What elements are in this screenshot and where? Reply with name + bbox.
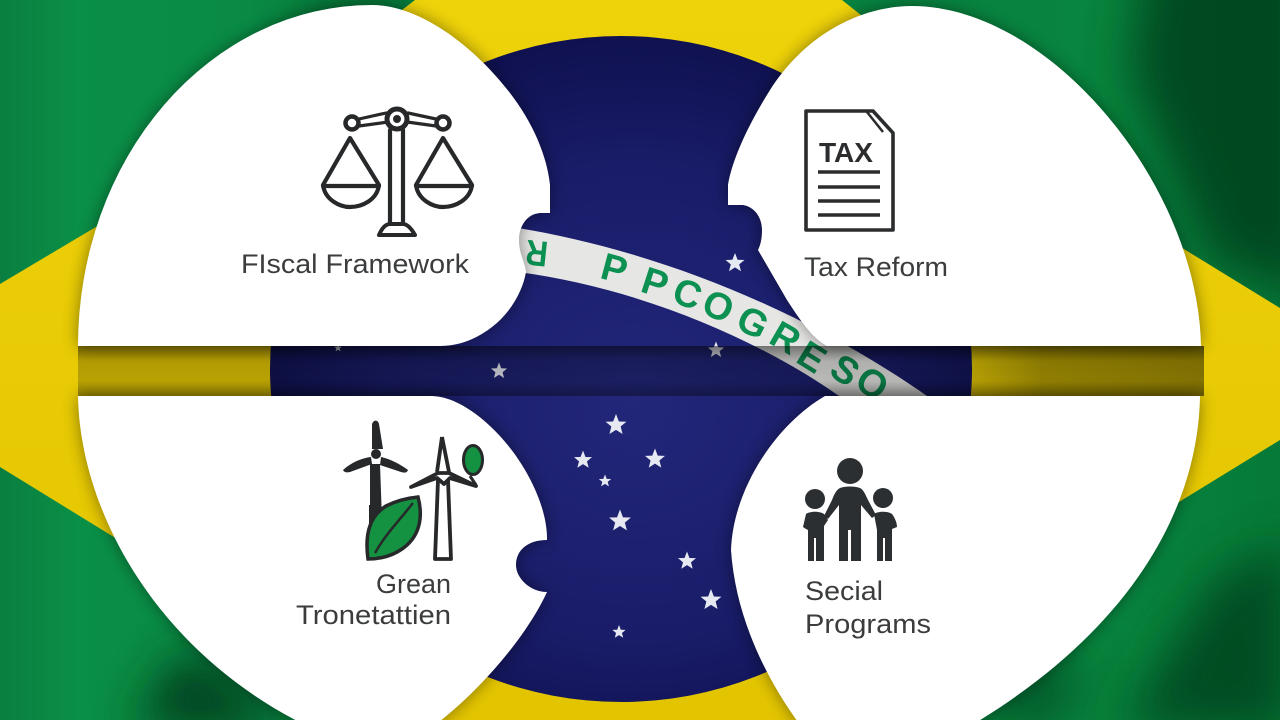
panel: Social Programs	[731, 396, 1200, 720]
panel: Fiscal Framework	[78, 5, 550, 346]
motto banner: G	[730, 298, 775, 349]
label: Green Transition: Grean	[376, 569, 451, 599]
icon: balance scales	[323, 109, 472, 235]
panel: Green Transition	[78, 396, 547, 720]
motto banner: O	[696, 282, 740, 332]
label: Fiscal Framework: FIscal Framework	[241, 249, 470, 279]
icon: tax document	[806, 111, 893, 230]
label: Tax Reform: Tax Reform	[804, 252, 948, 282]
label: Social Programs: Secial	[805, 576, 883, 606]
motto banner: P	[596, 246, 632, 293]
shaded centre band	[78, 346, 1204, 396]
large leaf	[367, 497, 420, 559]
motto banner: R	[524, 231, 550, 273]
motto banner: O	[848, 358, 896, 410]
motto banner: R	[763, 314, 807, 364]
label: Green Transition: Tronetattien	[296, 600, 451, 630]
label: Green Transition	[296, 569, 451, 630]
tax word: TAX	[819, 137, 873, 168]
blue globe	[270, 36, 972, 702]
icon: wind turbines and leaf	[343, 421, 482, 559]
motto banner: P	[636, 260, 673, 307]
label: Social Programs: Programs	[805, 609, 931, 639]
small leaf	[464, 446, 482, 474]
motto banner	[518, 228, 930, 410]
stars	[334, 253, 744, 638]
panel: Tax Reform	[728, 6, 1201, 346]
label: Social Programs	[805, 576, 931, 639]
motto banner: S	[822, 346, 867, 395]
motto banner: E	[789, 333, 833, 382]
icon: family	[803, 458, 897, 561]
motto banner: C	[667, 270, 707, 319]
